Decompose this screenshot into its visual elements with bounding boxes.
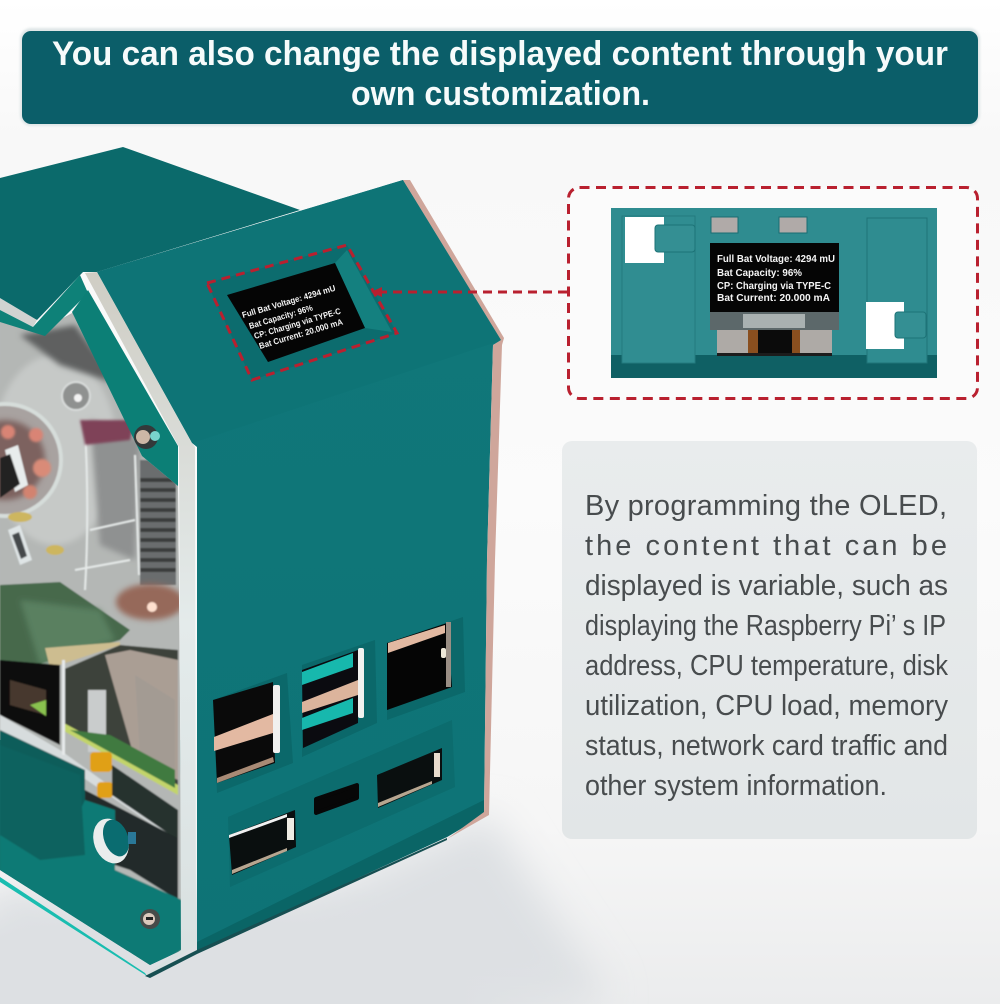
USB 3 stack [302,640,377,757]
USB 2 stack [213,673,293,793]
left acrylic edge [0,298,37,327]
panel: description text: other system information. [585,770,887,802]
title banner: You can also change the displayed content through your [52,35,948,73]
screw bottom [140,909,160,929]
lower right USB [377,748,442,808]
panel: description text: displaying the Raspberry Pi’ s IP [585,610,946,642]
module body [611,208,937,378]
acrylic front edge [85,272,196,975]
screw top [134,425,160,449]
port group [213,617,465,887]
lower bevel [197,800,484,952]
OLED recess on case [207,245,397,380]
panel: description text: the content that can be [585,530,947,562]
product photo: case with ports and OLED [0,147,504,978]
title banner [20,28,980,126]
panel: description text: By programming the OLED, [585,490,947,522]
connector arrow [371,287,568,297]
OLED screen: Bat Current: 20.000 mA [258,317,344,351]
OLED screen: CP: Charging via TYPE-C [253,306,342,341]
module screen: Full Bat Voltage: 4294 mU [717,254,835,265]
case interior seen through acrylic [0,300,190,972]
callout: OLED module [568,188,978,398]
OLED screen: Bat Capacity: 96% [248,302,314,331]
mounting ring [87,814,136,868]
module screen [710,243,839,312]
side teal band [72,290,178,486]
copper pipe [116,584,184,620]
fan housing [0,325,140,590]
OLED screen: Full Bat Voltage: 4294 mU [241,283,337,320]
lower teal base [0,800,182,972]
cutouts [625,217,664,263]
red dashed highlight [207,245,397,380]
right main face of case [97,180,502,952]
teal valley band [0,275,88,336]
lower left USB [229,810,296,875]
panel: description text: displayed is variable, such as [585,570,948,602]
module screen: Bat Capacity: 96% [717,268,802,279]
ribbon assembly [710,312,839,356]
title banner: own customization. [351,75,650,113]
upper roof shading [97,180,502,443]
lower port recess [228,720,455,887]
USB-C port [316,785,357,813]
panel: description text: address, CPU temperature, disk [585,650,948,682]
panel: description text: status, network card traffic and [585,730,948,762]
pink acrylic right edge [403,180,504,839]
windows [711,217,738,233]
heatsink fins [140,460,176,585]
Ethernet port [387,617,465,720]
panel: description text: utilization, CPU load, memory [585,690,948,722]
module screen: CP: Charging via TYPE-C [717,281,831,292]
OLED screen [227,263,365,362]
lower body: board and connectors [0,582,178,900]
module screen: Bat Current: 20.000 mA [717,293,830,304]
panel: description text [562,441,977,839]
case back roof [0,147,300,320]
